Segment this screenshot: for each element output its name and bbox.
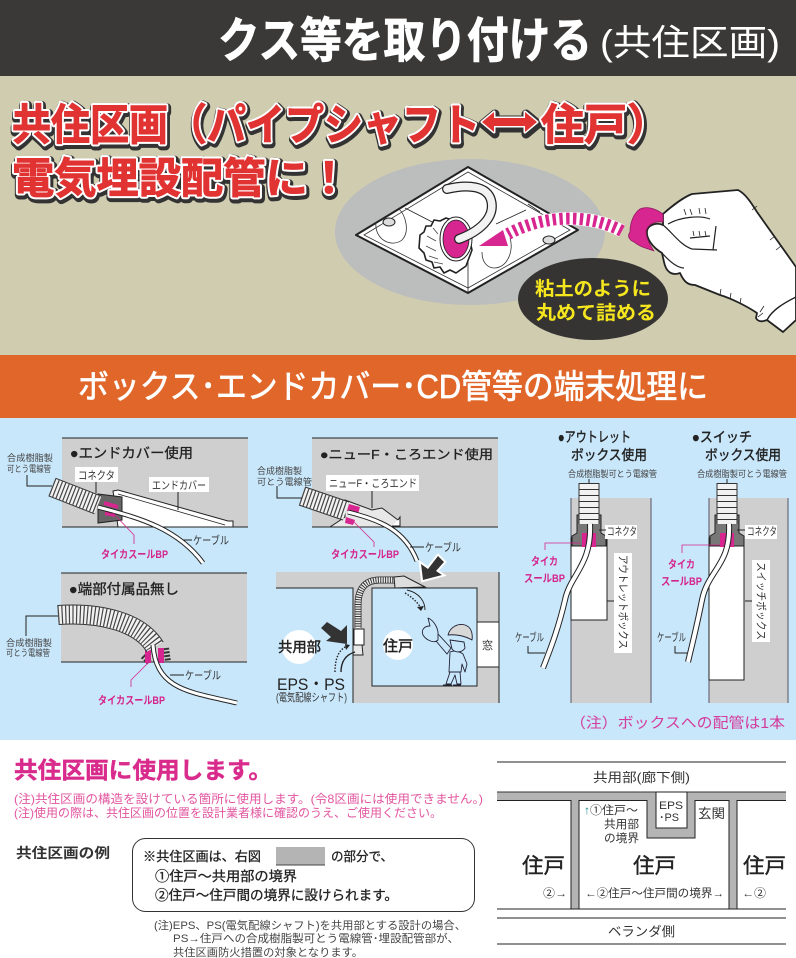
diagram: New F / koro-end: 合成樹脂製 <box>257 465 302 476</box>
diagram: switch box: ●スイッチ <box>692 429 752 445</box>
diagram: outlet box: タイカ <box>531 555 558 568</box>
arrow: magenta dashed to opening <box>479 219 622 246</box>
diagram: outlet box: ●アウトレット <box>558 429 631 445</box>
diagram: end cover: ●エンドカバー使用 <box>70 445 193 461</box>
diagram: compartment plan <box>497 762 786 944</box>
icon: gloved hand with clay <box>629 190 796 332</box>
label: EPS PS: EPS・PS <box>277 675 345 694</box>
diagram: outlet box: アウトレットボックス <box>616 555 630 649</box>
callout: compartment explanation <box>132 838 474 912</box>
window: 窓 <box>482 639 493 652</box>
icon: pointing worker <box>422 618 472 685</box>
conduit through wall <box>341 576 425 672</box>
diagram: compartment plan: EPS <box>659 800 683 812</box>
diagram: switch box: コネクタ <box>747 525 777 538</box>
diagram: end cover: ケーブル <box>193 533 229 547</box>
notes: EPS PS: PS→住戸への合成樹脂製可とう電線管･埋設配管部が、 <box>173 931 459 945</box>
diagram: compartment plan: 住戸 <box>522 855 565 878</box>
diagram: New F / koro-end: ●ニューF・ころエンド使用 <box>320 447 493 462</box>
diagram: compartment plan: 住戸 <box>743 855 786 878</box>
diagram: New F / koro-end: 可とう電線管 <box>257 476 312 487</box>
callout: roll like clay: 丸めて詰める <box>536 301 656 324</box>
diagram: compartment plan: ･PS <box>659 812 679 824</box>
orange banner: ボックス･エンドカバー･CD管等の端末処理に <box>78 368 708 405</box>
header band <box>0 0 796 76</box>
diagram: compartment plan: 玄関 <box>698 806 725 821</box>
diagram: no end fitting <box>6 573 247 707</box>
arrow: black left <box>321 622 347 644</box>
diagram: switch box: スールBP <box>661 576 702 588</box>
hero heading line 1: 住戸） <box>542 104 671 152</box>
diagram: switch box: ボックス使用 <box>705 447 781 463</box>
diagram: floor plan <box>276 556 499 704</box>
diagram: no end fitting: ケーブル <box>185 668 221 682</box>
diagram: outlet box: ケーブル <box>515 630 544 644</box>
diagram: no end fitting: ●端部付属品無し <box>69 581 179 597</box>
diagram: no end fitting: 可とう電線管 <box>6 647 50 658</box>
diagram: compartment plan: 共用部 <box>604 818 640 831</box>
label: example: 共住区画の例 <box>16 845 110 861</box>
notes: pink: (注)共住区画の構造を設けている箇所に使用します。(令8区画には使用できません。) <box>14 791 483 806</box>
gray ellipse backdrop <box>335 159 605 305</box>
label: common area: 共用部 <box>278 639 321 655</box>
diagram: compartment plan: ↑①住戸〜 <box>584 803 639 817</box>
note: one conduit per box: （注）ボックスへの配管は1本 <box>570 714 786 732</box>
diagram: compartment plan: 共用部(廊下側) <box>593 770 690 785</box>
nut <box>419 218 472 273</box>
orange banner <box>0 355 796 418</box>
diagram: end cover: 合成樹脂製 <box>7 452 53 463</box>
diagram: compartment plan: ②→ <box>543 887 567 900</box>
diagram: end cover: タイカスールBP <box>101 548 168 561</box>
diagram: switch box <box>657 429 788 703</box>
diagram: outlet box <box>515 429 657 703</box>
notes: EPS PS <box>154 918 466 958</box>
hero heading line 1: 共住区画（パイプシャフト <box>12 102 480 150</box>
diagram: switch box: ケーブル <box>657 630 686 644</box>
hero heading line 1: 住戸） <box>541 102 670 150</box>
diagram: end cover <box>7 438 248 563</box>
diagram: compartment plan: ←② <box>742 887 767 900</box>
diagram: end cover: コネクタ <box>78 469 115 482</box>
diagram: outlet box: スールBP <box>524 573 565 585</box>
label: common area <box>278 630 321 664</box>
hero heading line 2: 電気埋設配管に！ <box>12 155 350 202</box>
diagram: switch box: 合成樹脂製可とう電線管 <box>697 468 787 479</box>
callout: compartment explanation: の部分で、 <box>331 849 393 864</box>
diagram: end cover: エンドカバー <box>152 479 206 492</box>
hero heading line 2: 電気埋設配管に！ <box>12 155 350 202</box>
diagram: New F / koro-end: ケーブル <box>425 540 461 554</box>
diagram: New F / koro-end <box>257 438 498 561</box>
diagram: outlet box: 合成樹脂製可とう電線管 <box>568 468 657 479</box>
diagram: compartment plan: ←②住戸〜住戸間の境界→ <box>585 886 724 900</box>
diagram: no end fitting: タイカスールBP <box>98 694 165 707</box>
diagram: New F / koro-end: タイカスールBP <box>331 548 399 561</box>
hero heading line 1: 住戸） <box>541 102 670 150</box>
diagram: switch box: タイカ <box>668 558 695 571</box>
diagram: end cover: 可とう電線管 <box>7 463 51 474</box>
diagram: New F / koro-end: ニューF・ころエンド <box>329 478 417 490</box>
arrows: dotted <box>335 590 425 672</box>
title: (共住区画) <box>600 22 780 63</box>
callout: compartment explanation: ※共住区画は、右図 <box>143 849 261 864</box>
notes: pink: (注)使用の際は、共住区画の位置を設計業者様に確認のうえ、ご使用ください。 <box>14 805 442 820</box>
arrow: black top <box>421 556 444 580</box>
diagram: outlet box: コネクタ <box>607 525 637 538</box>
window <box>477 622 499 667</box>
callout: roll like clay <box>518 258 668 340</box>
label: dwelling: 住戸 <box>383 638 413 655</box>
diagram: compartment plan: の境界 <box>604 832 640 845</box>
pipe <box>447 187 492 239</box>
diagram: no end fitting: 合成樹脂製 <box>6 637 52 648</box>
diagram: outlet box: ボックス使用 <box>571 447 647 463</box>
callout: compartment explanation: ②住戸〜住戸間の境界に設けられます。 <box>155 888 398 903</box>
diagram: switch box: スイッチボックス <box>754 562 768 640</box>
notes: EPS PS: (注)EPS、PS(電気配線シャフト)を共用部とする設計の場合、 <box>154 918 466 932</box>
hero heading line 2: 電気埋設配管に！ <box>13 157 351 204</box>
icon: box end plate with conduit <box>356 167 578 293</box>
label: EPS PS <box>276 675 347 704</box>
hero heading line 1: 共住区画（パイプシャフト <box>13 104 481 152</box>
callout: roll like clay: 粘土のように <box>535 278 651 300</box>
label: dwelling <box>383 630 413 660</box>
title: クス等を取り付ける <box>218 15 592 68</box>
hero heading line 1: 共住区画（パイプシャフト <box>12 102 480 150</box>
heading: used in compartments: 共住区画に使用します。 <box>14 757 272 783</box>
panel: light blue usage diagrams <box>0 418 796 740</box>
diagram: compartment plan: ベランダ側 <box>608 924 675 939</box>
label: EPS PS: (電気配線シャフト) <box>276 690 347 704</box>
notes: pink <box>14 791 483 820</box>
callout: compartment explanation: ①住戸〜共用部の境界 <box>155 869 297 884</box>
diagram: compartment plan: 住戸 <box>633 855 676 878</box>
panel: khaki hero <box>0 76 796 355</box>
